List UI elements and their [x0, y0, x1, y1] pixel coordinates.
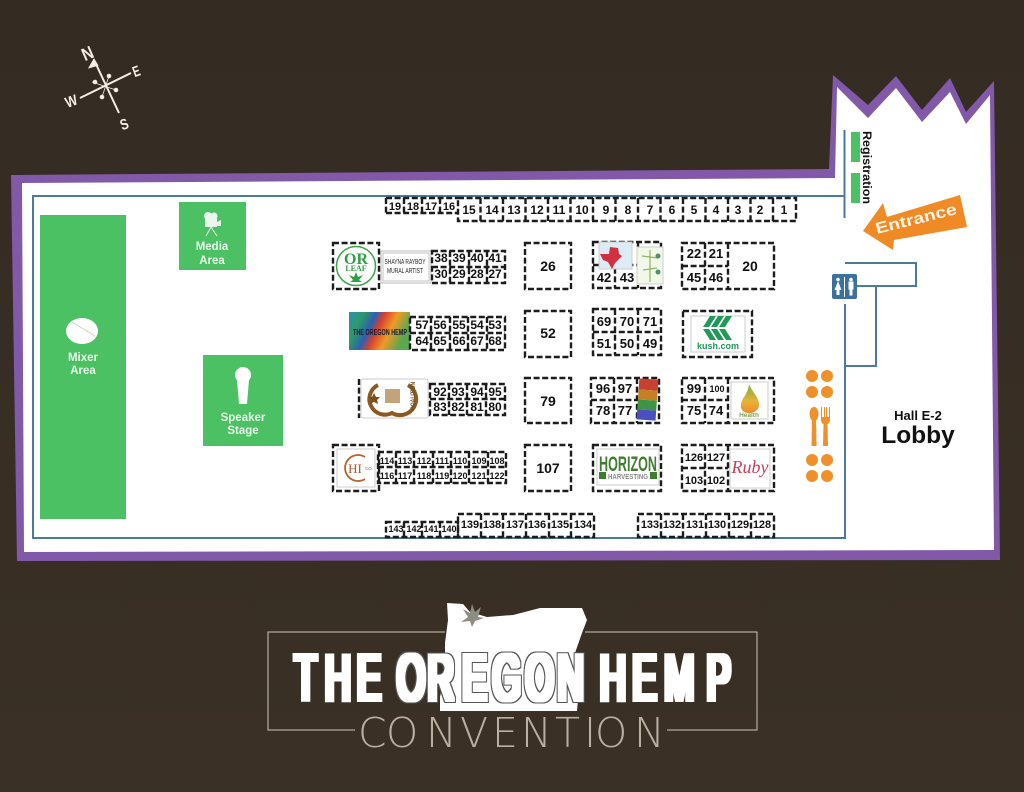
panel: media area — [179, 202, 246, 270]
booths: 57-53 and 64-68: 65 — [433, 334, 447, 348]
booth logo: OR Leaf: LEAF — [345, 264, 367, 273]
booths: 92-95 and 83-80: 95 — [488, 385, 502, 399]
arrow: entrance: Entrance — [874, 201, 959, 238]
panel: speaker stage: Stage — [227, 425, 259, 437]
arrow: entrance — [863, 195, 967, 250]
booths: 57-53 and 64-68: 66 — [452, 334, 466, 348]
booths: 22, 21, 45, 46, 20: 21 — [709, 246, 723, 261]
logo: The Oregon Hemp Convention: OREGON — [397, 643, 584, 715]
compass: E — [130, 63, 143, 81]
booths: bottom row 133-128: 132 — [663, 519, 681, 531]
booths: top row 15-1: 15 — [462, 203, 476, 217]
booths: 69-71 and 51-49: 51 — [597, 336, 611, 351]
booths: bottom row 143-140: 141 — [423, 524, 439, 534]
icon: handshake — [66, 318, 98, 344]
booths: 38-41 and 30-27: 38 — [434, 251, 448, 265]
booths: 99, 100, 75, 74 with Health logo: 100 — [709, 384, 725, 394]
logo: The Oregon Hemp Convention — [268, 603, 757, 757]
booths: 57-53 and 64-68: 57 — [415, 318, 429, 332]
booths: 38-41 and 30-27: 41 — [488, 251, 502, 265]
panel: speaker stage: Speaker — [221, 412, 266, 424]
booths: 38-41 and 30-27: 28 — [470, 267, 484, 281]
booth logo: Horizon Harvesting — [593, 445, 661, 491]
booths: 114-108 and 116-122 — [378, 452, 506, 483]
booths: 92-95 and 83-80: 82 — [451, 400, 465, 414]
booths: 69-71 and 51-49: 69 — [597, 314, 611, 329]
booth logo: CH Co.: HI — [348, 461, 362, 476]
booths: 126, 127, 103, 102 with Ruby logo: 102 — [707, 475, 725, 487]
panel: media area: Media — [196, 241, 229, 253]
icon: restrooms — [832, 274, 857, 299]
booths: 114-108 and 116-122: 116 — [380, 471, 394, 481]
icon: food area — [806, 370, 833, 482]
booths: 57-53 and 64-68: 54 — [470, 318, 484, 332]
booths: 57-53 and 64-68: 67 — [470, 334, 484, 348]
booths: top row 15-1: 14 — [485, 203, 499, 217]
booths: bottom row 143-140: 140 — [441, 524, 457, 534]
booths: bottom row 143-140 — [386, 522, 458, 537]
booths: bottom row 133-128 — [638, 514, 774, 537]
booths: 57-53 and 64-68: 68 — [488, 334, 502, 348]
booths: bottom row 139-134: 136 — [528, 519, 546, 531]
booth logo: Shayna Rayboy mural artist: MURAL ARTIST — [387, 268, 424, 275]
booths: bottom row 133-128: 131 — [686, 519, 704, 531]
booths: 22, 21, 45, 46, 20: 22 — [687, 246, 701, 261]
booths: 57-53 and 64-68: 64 — [415, 334, 429, 348]
booths: bottom row 139-134: 139 — [461, 519, 479, 531]
booths: 69-71 and 51-49: 71 — [643, 314, 657, 329]
logo: The Oregon Hemp Convention: CONVENTION — [358, 709, 665, 757]
hall walls — [33, 130, 916, 538]
compass — [63, 42, 143, 134]
booths: top row 15-1: 10 — [575, 203, 589, 217]
booths: 99, 100, 75, 74 with Health logo: 74 — [709, 403, 724, 418]
booths: 92-95 and 83-80: 94 — [470, 385, 484, 399]
booths: 114-108 and 116-122: 118 — [417, 471, 431, 481]
booths: 22, 21, 45, 46, 20: 20 — [742, 258, 758, 274]
booths: 96, 97, 78, 77 with rainbow logo — [591, 378, 659, 423]
compass: S — [118, 115, 131, 134]
booths: bottom row 139-134 — [458, 514, 594, 537]
booths: 114-108 and 116-122: 120 — [452, 471, 468, 481]
booth logo: The Oregon Hemp tie-dye: THE OREGON HEMP — [353, 328, 407, 337]
booth 52 — [525, 311, 571, 357]
booth logo: Kush.com — [683, 311, 752, 357]
lobby label — [881, 408, 955, 449]
booth logo: Horizon Harvesting: HORIZON — [599, 453, 657, 476]
booths: top row 15-1: 4 — [713, 203, 720, 217]
booths: top row 15-1: 1 — [781, 203, 788, 217]
booths: 96, 97, 78, 77 with rainbow logo: 77 — [618, 403, 632, 418]
booths: 38-41 and 30-27: 40 — [470, 251, 484, 265]
booths: 57-53 and 64-68: 56 — [433, 318, 447, 332]
booth logo: Shayna Rayboy mural artist: SHAYNA RAYBOY — [384, 259, 426, 266]
booths: 114-108 and 116-122: 110 — [453, 456, 467, 466]
booths: bottom row 139-134: 135 — [551, 519, 569, 531]
booths: bottom row 133-128: 129 — [731, 519, 749, 531]
booths: bottom row 133-128: 133 — [641, 519, 659, 531]
booths: top row 19-16 — [386, 198, 458, 213]
booths: 114-108 and 116-122: 119 — [435, 471, 449, 481]
booths: 22, 21, 45, 46, 20 — [682, 243, 774, 289]
panel: mixer area: Mixer — [68, 352, 99, 364]
booths: top row 15-1: 12 — [530, 203, 544, 217]
booths: 92-95 and 83-80: 93 — [451, 385, 465, 399]
booths: top row 15-1: 8 — [625, 203, 632, 217]
booths: 57-53 and 64-68: 53 — [488, 318, 502, 332]
booths: 92-95 and 83-80: 83 — [433, 400, 447, 414]
booth 107: 107 — [536, 460, 560, 476]
booths: 96, 97, 78, 77 with rainbow logo: 78 — [596, 403, 610, 418]
registration: Registration — [860, 131, 872, 204]
booths: 126, 127, 103, 102 with Ruby logo — [682, 445, 774, 491]
booths: top row 15-1: 9 — [603, 203, 610, 217]
booths: 126, 127, 103, 102 with Ruby logo: 126 — [685, 452, 703, 464]
booths: 22, 21, 45, 46, 20: 46 — [709, 270, 723, 285]
booths: top row 15-1: 2 — [757, 203, 764, 217]
booths: 114-108 and 116-122: 121 — [471, 471, 487, 481]
booths: top row 19-16: 18 — [407, 201, 419, 213]
booths: 99, 100, 75, 74 with Health logo: Health — [739, 412, 759, 419]
booths: bottom row 133-128: 130 — [708, 519, 726, 531]
booths: 57-53 and 64-68: 55 — [452, 318, 466, 332]
compass: N — [78, 42, 97, 65]
booths: 114-108 and 116-122: 111 — [435, 456, 449, 466]
booth 26 — [525, 243, 571, 289]
booths: bottom row 133-128: 128 — [753, 519, 771, 531]
booth logo: Coalition: COALITION — [411, 382, 417, 410]
booths: 114-108 and 116-122: 117 — [398, 471, 412, 481]
logo: The Oregon Hemp Convention: THE — [295, 643, 381, 715]
booths: bottom row 143-140: 143 — [388, 524, 404, 534]
booths: 38-41 and 30-27: 30 — [434, 267, 448, 281]
booth logo: The Oregon Hemp tie-dye — [349, 312, 410, 350]
booths: 92-95 and 83-80: 80 — [488, 400, 502, 414]
booths: top row 15-1: 3 — [735, 203, 742, 217]
booths: 114-108 and 116-122: 122 — [489, 471, 505, 481]
booths: 69-71 and 51-49: 70 — [620, 314, 634, 329]
booths: 69-71 and 51-49: 50 — [620, 336, 634, 351]
booths: 114-108 and 116-122: 109 — [471, 456, 487, 466]
booths: 114-108 and 116-122: 112 — [417, 456, 431, 466]
booths: 38-41 and 30-27: 39 — [452, 251, 466, 265]
booths: 99, 100, 75, 74 with Health logo: 99 — [687, 381, 701, 396]
booths: top row 15-1 — [458, 198, 796, 221]
booth logo: CH Co. — [333, 445, 379, 491]
booths: 96, 97, 78, 77 with rainbow logo: 97 — [618, 381, 632, 396]
booths: bottom row 139-134: 138 — [483, 519, 501, 531]
booth 26: 26 — [540, 258, 556, 274]
booths: 42, 43 group with logos: 43 — [620, 270, 634, 285]
booth logo: OR Leaf: OR — [344, 251, 368, 268]
compass: W — [63, 91, 81, 112]
booths: top row 19-16: 17 — [425, 201, 437, 213]
booths: 92-95 and 83-80: 81 — [470, 400, 484, 414]
booths: top row 15-1: 7 — [647, 203, 654, 217]
booths: 69-71 and 51-49 — [593, 309, 661, 355]
booths: 92-95 and 83-80: 92 — [433, 385, 447, 399]
logo: The Oregon Hemp Convention: HEMP — [600, 643, 731, 715]
booths: 114-108 and 116-122: 108 — [489, 456, 505, 466]
booths: 99, 100, 75, 74 with Health logo: 75 — [687, 403, 701, 418]
booths: bottom row 143-140: 142 — [406, 524, 422, 534]
booths: 22, 21, 45, 46, 20: 45 — [687, 270, 701, 285]
booths: top row 15-1: 11 — [553, 203, 566, 217]
booth logo: OR Leaf — [333, 243, 379, 289]
booths: 92-95 and 83-80 — [430, 384, 505, 415]
booths: 42, 43 group with logos: 42 — [597, 270, 611, 285]
booths: top row 19-16: 16 — [443, 201, 455, 213]
booths: bottom row 139-134: 134 — [574, 519, 593, 531]
booths: 114-108 and 116-122: 114 — [380, 456, 394, 466]
booths: 38-41 and 30-27: 27 — [488, 267, 502, 281]
panel: speaker stage — [203, 355, 283, 446]
booths: top row 15-1: 5 — [691, 203, 698, 217]
booth logo: Kush.com: kush.com — [697, 341, 739, 351]
floor plan outline — [11, 75, 1000, 561]
booths: 38-41 and 30-27 — [432, 251, 505, 283]
booth logo: CH Co.: CO. — [365, 466, 373, 471]
booths: 42, 43 group with logos — [593, 242, 663, 288]
icon: hemp leaf — [461, 604, 484, 627]
booths: 57-53 and 64-68 — [410, 317, 505, 350]
booths: bottom row 139-134: 137 — [506, 519, 524, 531]
booths: 114-108 and 116-122: 113 — [398, 456, 412, 466]
booth 107 — [525, 445, 571, 491]
booth 52: 52 — [540, 325, 556, 341]
booth logo: Horizon Harvesting: HARVESTING — [608, 472, 648, 481]
booths: 126, 127, 103, 102 with Ruby logo: 103 — [685, 475, 703, 487]
booths: top row 19-16: 19 — [389, 201, 401, 213]
booth logo: Coalition — [359, 379, 428, 418]
registration — [851, 131, 872, 204]
booths: 126, 127, 103, 102 with Ruby logo: Ruby — [731, 457, 769, 477]
booth logo: Shayna Rayboy mural artist — [381, 251, 431, 283]
booth 79 — [525, 378, 571, 423]
icon: microphone — [235, 367, 251, 404]
booth 79: 79 — [540, 393, 556, 409]
lobby label: Hall E-2 — [894, 408, 942, 423]
booths: top row 15-1: 13 — [507, 203, 521, 217]
booths: 126, 127, 103, 102 with Ruby logo: 127 — [707, 452, 725, 464]
panel: media area: Area — [199, 255, 225, 267]
lobby label: Lobby — [881, 422, 955, 449]
panel: mixer area: Area — [70, 365, 96, 377]
icon: film camera — [204, 212, 221, 236]
booths: 99, 100, 75, 74 with Health logo — [682, 378, 774, 423]
booths: top row 15-1: 6 — [669, 203, 676, 217]
booths: 38-41 and 30-27: 29 — [452, 267, 466, 281]
icon: Oregon state silhouette — [440, 603, 587, 711]
booths: 69-71 and 51-49: 49 — [643, 336, 657, 351]
booths: 96, 97, 78, 77 with rainbow logo: 96 — [596, 381, 610, 396]
panel: mixer area — [40, 215, 126, 519]
